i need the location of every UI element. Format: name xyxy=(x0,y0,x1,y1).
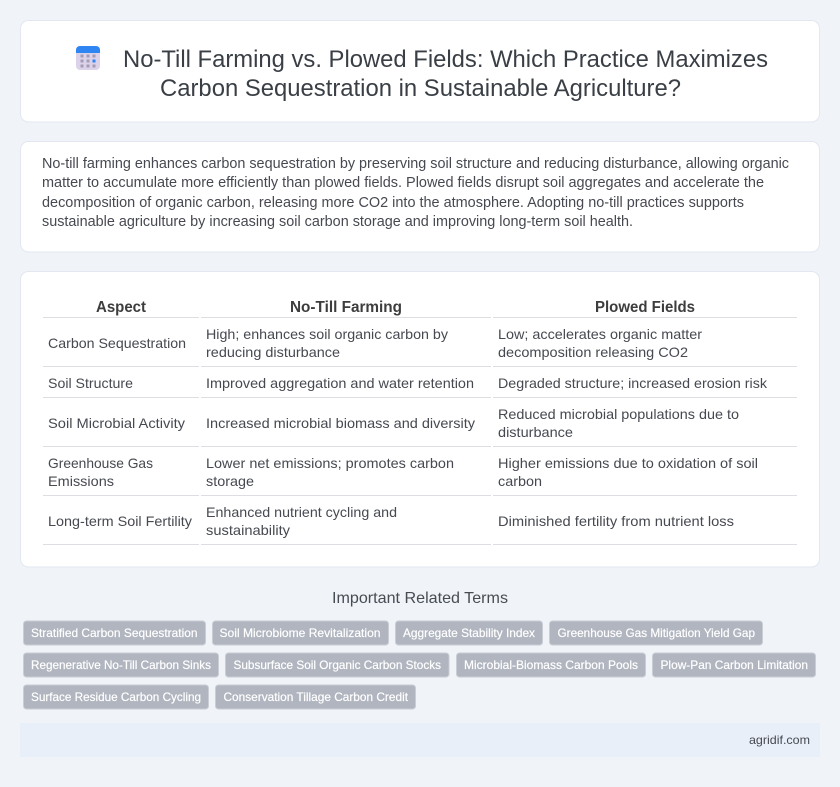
row: soil structure xyxy=(43,375,797,398)
header panel xyxy=(20,20,820,122)
text block: introduction: No-till farming enhances carbon sequestration by preserving soil structure and reducing disturbance, allowing organic xyxy=(42,156,789,172)
row: long-term soil fertility: sustainability xyxy=(206,522,290,538)
row: soil structure: Improved aggregation and water retention xyxy=(206,375,474,391)
tags: related terms: Surface Residue Carbon Cycling xyxy=(31,690,201,704)
row: long-term soil fertility: Enhanced nutrient cycling and xyxy=(206,504,397,520)
row: greenhouse gas emissions: Higher emissions due to oxidation of soil xyxy=(498,455,758,471)
row: soil microbial activity: Soil Microbial Activity xyxy=(48,415,185,431)
tags: related terms xyxy=(24,621,816,709)
tags: related terms: Stratified Carbon Sequestration xyxy=(31,626,198,640)
row: soil structure: Degraded structure; increased erosion risk xyxy=(498,375,768,391)
row: long-term soil fertility xyxy=(43,504,797,545)
row: long-term soil fertility: Diminished fertility from nutrient loss xyxy=(498,513,734,529)
row: carbon sequestration: decomposition releasing CO2 xyxy=(498,344,688,360)
text block: introduction xyxy=(42,156,789,230)
row: soil structure: Soil Structure xyxy=(48,375,133,391)
heading: important related terms: Important Related Terms xyxy=(332,590,508,607)
table header row xyxy=(43,299,797,318)
text block: introduction: decomposition of organic carbon, releasing more CO2 into the atmosphere. Adopting no-till practices supports xyxy=(42,195,744,211)
tags: related terms: Conservation Tillage Carbon Credit xyxy=(224,690,409,704)
row: soil microbial activity: disturbance xyxy=(498,424,573,440)
tags: related terms: Greenhouse Gas Mitigation Yield Gap xyxy=(558,626,755,640)
table header row: Plowed Fields xyxy=(595,299,695,316)
row: soil microbial activity: Increased microbial biomass and diversity xyxy=(206,415,475,431)
row: carbon sequestration: Low; accelerates organic matter xyxy=(498,326,702,342)
row: carbon sequestration: High; enhances soil organic carbon by xyxy=(206,326,448,342)
tags: related terms: Aggregate Stability Index xyxy=(403,626,535,640)
tags: related terms: Soil Microbiome Revitalization xyxy=(220,626,380,640)
row: greenhouse gas emissions: Emissions xyxy=(48,473,114,489)
row: greenhouse gas emissions: Greenhouse Gas xyxy=(48,455,153,471)
tags: related terms: Subsurface Soil Organic Carbon Stocks xyxy=(234,658,441,672)
text block: introduction: matter to accumulate more efficiently than plowed fields. Plowed fields disrupt soil aggregates and accelerate the xyxy=(42,175,764,191)
panel: introduction xyxy=(20,142,820,252)
row: soil microbial activity xyxy=(43,406,797,447)
icon: calendar xyxy=(76,46,100,70)
row: carbon sequestration: reducing disturbance xyxy=(206,344,340,360)
title xyxy=(123,46,768,102)
row: greenhouse gas emissions: storage xyxy=(206,473,254,489)
row: soil microbial activity: Reduced microbial populations due to xyxy=(498,406,739,422)
row: carbon sequestration xyxy=(43,326,797,367)
title: Carbon Sequestration in Sustainable Agriculture? xyxy=(160,75,681,102)
panel: comparison table xyxy=(20,272,820,567)
row: greenhouse gas emissions: Lower net emissions; promotes carbon xyxy=(206,455,454,471)
row: long-term soil fertility: Long-term Soil Fertility xyxy=(48,513,192,529)
row: greenhouse gas emissions xyxy=(43,455,797,496)
row: greenhouse gas emissions: carbon xyxy=(498,473,542,489)
tags: related terms: Microbial-Biomass Carbon Pools xyxy=(464,658,638,672)
title: No-Till Farming vs. Plowed Fields: Which Practice Maximizes xyxy=(123,46,768,73)
tags: related terms: Plow-Pan Carbon Limitation xyxy=(660,658,808,672)
text block: introduction: sustainable agriculture by increasing soil carbon storage and improving long-term soil health. xyxy=(42,214,633,230)
row: carbon sequestration: Carbon Sequestration xyxy=(48,335,186,351)
table header row: No-Till Farming xyxy=(290,299,402,316)
footer text: agridif.com xyxy=(749,733,810,747)
footer bar xyxy=(20,723,820,757)
tags: related terms: Regenerative No-Till Carbon Sinks xyxy=(31,658,211,672)
table header row: Aspect xyxy=(96,299,147,316)
